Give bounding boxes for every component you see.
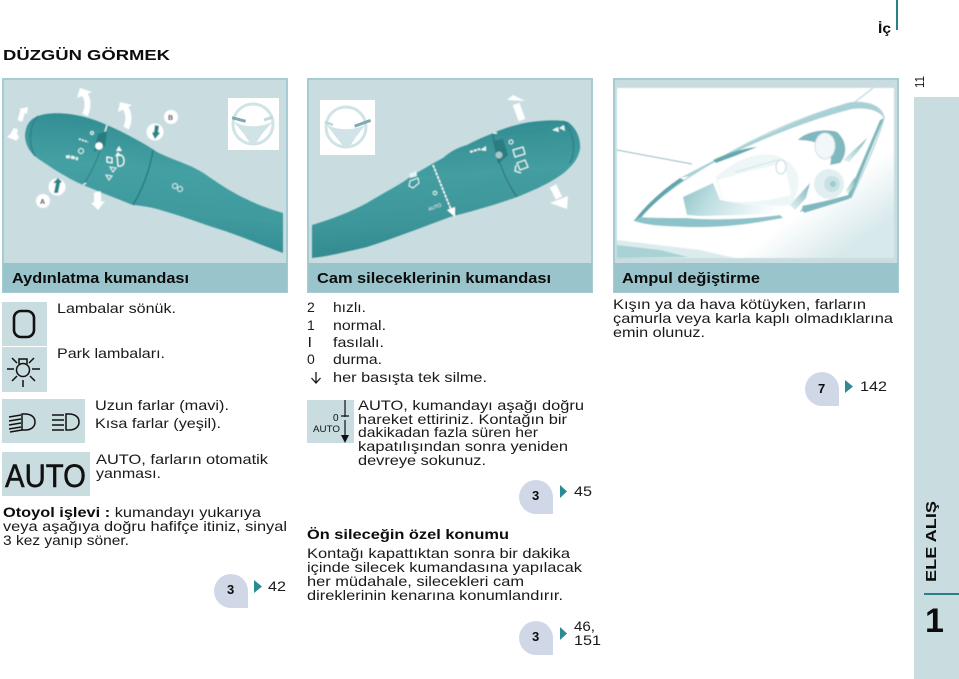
caption band: [308, 263, 592, 292]
sidebar: [914, 97, 959, 679]
text: motorway function: veya aşağıya doğru hafifçe itiniz, sinyal: [3, 518, 287, 534]
text: bulb note: emin olunuz.: [613, 324, 705, 340]
text: front wiper position: Kontağı kapattıktan sonra bir dakika: [307, 545, 570, 561]
lighting stalk illustration: [7, 88, 283, 253]
wiper stalk illustration: AUTO: [428, 202, 443, 213]
upper lens: [798, 130, 845, 165]
lighting stalk illustration: B: [168, 115, 173, 122]
text: AUTO wiper: devreye sokunuz.: [358, 452, 486, 468]
reference badge: 3 / 42: 3: [227, 582, 234, 597]
wiper speed list: 2: [307, 299, 315, 315]
text: bulb note: çamurla veya karla kaplı olmadıklarına: [613, 310, 893, 326]
text: parking lights: Park lambaları.: [57, 345, 165, 361]
wiper speed list: durma.: [333, 351, 382, 367]
section tab: İç: İç: [878, 20, 891, 36]
text: front wiper position: [307, 545, 583, 603]
wiper speed list: 1: [307, 317, 315, 333]
wiper speed list: fasılalı.: [333, 334, 384, 350]
wiper speed list: her basışta tek silme.: [333, 369, 487, 385]
arrows: [83, 92, 87, 115]
headlight illustration: [617, 88, 894, 258]
icon: high and low beam: [2, 399, 85, 443]
reference badge: 3 / 45: [519, 480, 592, 514]
wiper speed list: normal.: [333, 317, 386, 333]
caption band: [3, 263, 287, 292]
wiper stalk illustration: [312, 95, 580, 258]
reference badge: 3 / 46, 151: 46,: [574, 618, 595, 634]
icon: AUTO: AUTO: [5, 458, 86, 494]
section tab: İç: [878, 0, 898, 36]
reference badge: 3 / 42: 42: [268, 578, 286, 594]
lighting stalk illustration: A: [40, 199, 45, 206]
reference badge: 3 / 46, 151: 3: [532, 629, 539, 644]
main lens: [683, 183, 790, 216]
reference badge: 7 / 142: 7: [818, 381, 825, 396]
panel: bulb replacement: Ampul değiştirme: [622, 270, 760, 287]
reference badge: 3 / 46, 151: 151: [574, 632, 601, 648]
text: AUTO wiper: kapatılışından sonra yeniden: [358, 438, 568, 454]
panel: lighting control: [3, 79, 287, 292]
icon: AUTO wiper position: AUTO: [313, 424, 340, 434]
page number: 11: [912, 76, 927, 88]
title: DÜZGÜN GÖRMEK: [3, 47, 170, 64]
reference badge: 3 / 45: 45: [574, 483, 592, 499]
A marker: [48, 178, 66, 196]
text: AUTO wiper: [358, 397, 584, 468]
text: lights off: Lambalar sönük.: [57, 300, 176, 316]
panel: lighting control: Aydınlatma kumandası: [12, 270, 189, 287]
reference badge: 3 / 42: [214, 574, 286, 608]
wiper speed list: hızlı.: [333, 299, 366, 315]
text: motorway function: Otoyol işlevi : kumandayı yukarıya: [3, 504, 261, 520]
chapter title: ELE ALIŞ: [923, 501, 940, 582]
text: AUTO lights: [96, 451, 269, 481]
reference badge: 7 / 142: 142: [860, 378, 887, 394]
text: front wiper position: her müdahale, silecekleri cam: [307, 573, 524, 589]
reference badge: 7 / 142: [805, 372, 887, 406]
lower lens: [814, 169, 844, 199]
text: bulb note: [613, 296, 893, 340]
housing: [634, 103, 884, 227]
icon: AUTO wiper position: [307, 400, 354, 443]
text: AUTO wiper: hareket ettiriniz. Kontağın bir: [358, 411, 567, 427]
B marker: [146, 124, 164, 140]
chapter number: 1: [925, 602, 944, 640]
reference badge: 3 / 46, 151: [519, 618, 601, 655]
text: high and low beam: [95, 397, 229, 431]
steering wheel inset: [320, 100, 375, 155]
text: bulb note: Kışın ya da hava kötüyken, farların: [613, 296, 866, 312]
icon: lights off: [2, 302, 47, 346]
wiper speed list: 0: [307, 351, 315, 367]
heading: front wiper position: Ön sileceğin özel konumu: [307, 526, 509, 542]
reference badge: 3 / 45: 3: [532, 488, 539, 503]
text: motorway function: 3 kez yanıp söner.: [3, 532, 129, 548]
text: AUTO wiper: dakikadan fazla süren her: [358, 424, 538, 440]
icon: parking lights: [2, 347, 47, 392]
text: high and low beam: Uzun farlar (mavi).: [95, 397, 229, 413]
text: AUTO lights: yanması.: [96, 465, 161, 481]
icon: AUTO wiper position: 0: [333, 413, 339, 424]
panel: wiper control: Cam sileceklerinin kumandası: [317, 270, 551, 287]
wiper speed list: [307, 299, 487, 385]
text: front wiper position: direklerinin kenarına konumlandırır.: [307, 587, 563, 603]
panel: wiper control: [308, 79, 592, 292]
arrows: [516, 104, 522, 120]
text: front wiper position: içinde silecek kumandasına yapılacak: [307, 559, 583, 575]
text: AUTO wiper: AUTO, kumandayı aşağı doğru: [358, 397, 584, 413]
panel: bulb replacement: [614, 79, 898, 292]
steering wheel inset: [228, 98, 279, 150]
text: high and low beam: Kısa farlar (yeşil).: [95, 415, 221, 431]
caption band: [614, 263, 898, 292]
text: motorway function: [3, 504, 287, 548]
text: AUTO lights: AUTO, farların otomatik: [96, 451, 269, 467]
